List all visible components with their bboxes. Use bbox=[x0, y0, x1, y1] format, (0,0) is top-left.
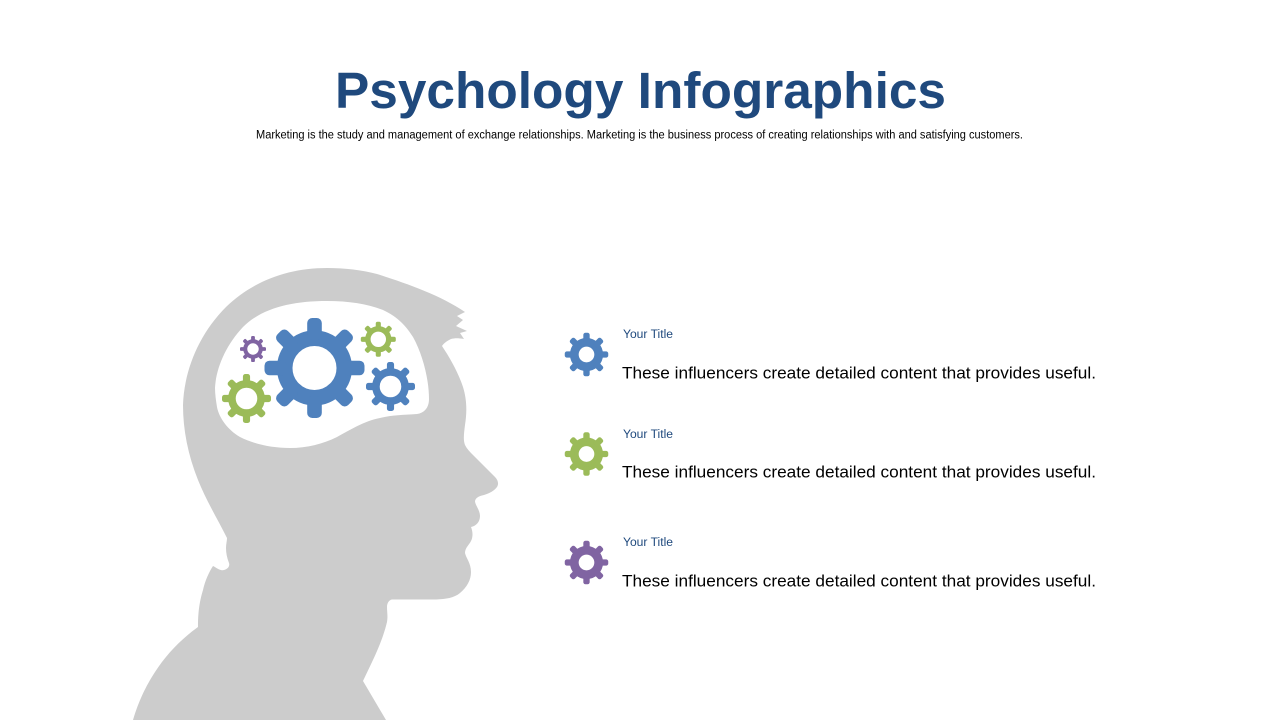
item 1 text: These influencers create detailed content that provides useful. bbox=[622, 364, 1096, 382]
icon: blue gear bbox=[366, 362, 415, 411]
item 2 text: These influencers create detailed content that provides useful. bbox=[622, 462, 1096, 482]
head illustration with gears bbox=[133, 268, 498, 720]
list item 1 bbox=[565, 329, 1096, 382]
icon: green gear bbox=[565, 432, 608, 476]
item 3 text: These influencers create detailed content that provides useful. bbox=[622, 572, 1096, 590]
title: Psychology Infographics bbox=[335, 62, 946, 119]
icon: purple gear bbox=[565, 541, 608, 584]
icon: large blue gear bbox=[264, 318, 364, 418]
list item 3 bbox=[565, 537, 1096, 590]
icon: small purple gear bbox=[240, 336, 266, 362]
list item 2 bbox=[565, 429, 1096, 482]
icon: blue gear bbox=[565, 333, 608, 376]
item 1 title: Your Title bbox=[623, 329, 673, 341]
brain cavity bbox=[215, 301, 429, 448]
item 2 title: Your Title bbox=[623, 429, 673, 441]
head silhouette bbox=[133, 268, 498, 720]
subtitle text: Marketing is the study and management of exchange relationships. Marketing is the business process of creating relationships with and satisfying customers. bbox=[256, 130, 1023, 142]
icon: small green gear bbox=[361, 322, 396, 357]
icon: large green gear bbox=[222, 374, 271, 423]
item 3 title: Your Title bbox=[623, 537, 673, 549]
